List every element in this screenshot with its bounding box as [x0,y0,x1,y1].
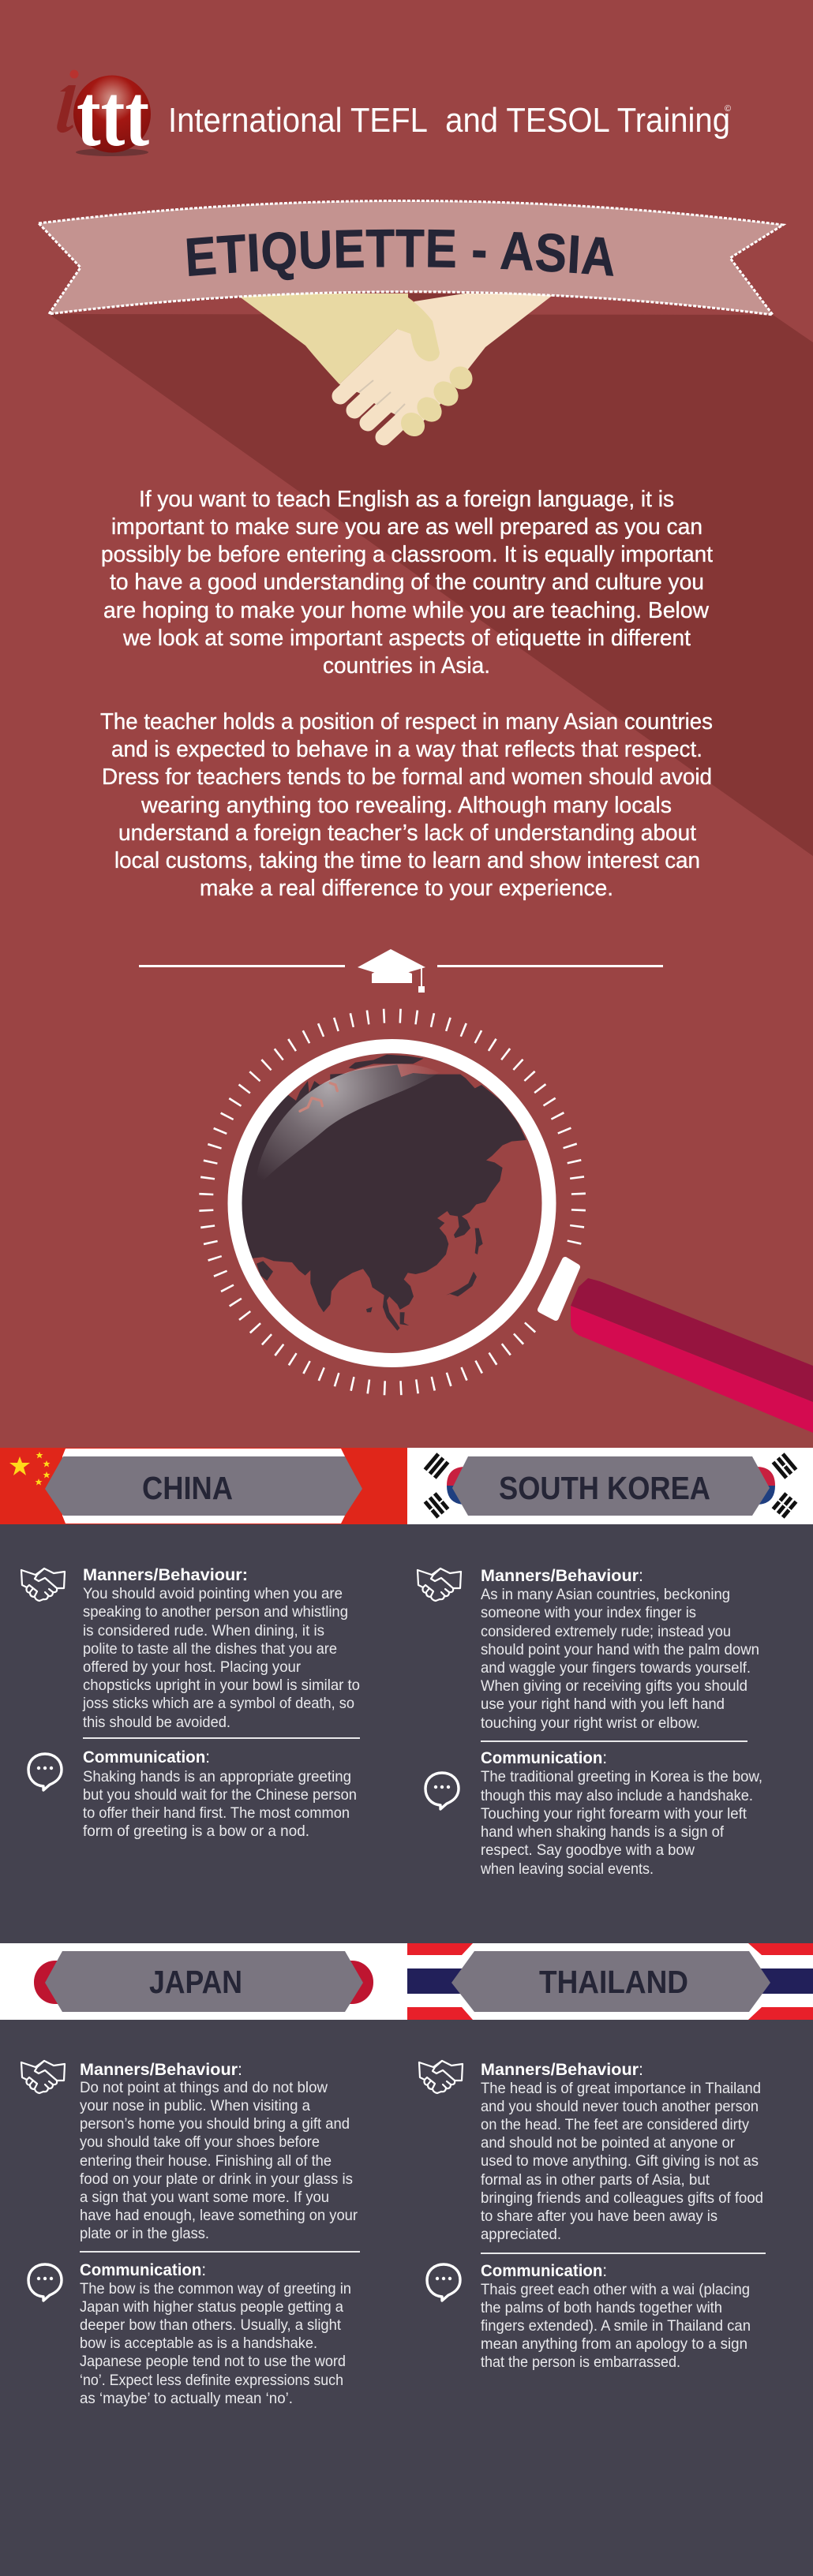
text: manners: formal as in other parts of Asia, but [481,2171,710,2189]
lens highlight [259,1064,435,1174]
text: communication: deeper bow than others. Usually, a slight [80,2316,342,2334]
text: manners: used to move anything. Gift giving is not as [481,2152,759,2170]
paragraph 1: countries in Asia. [323,653,490,679]
long shadow [49,314,813,856]
magnifying glass over map of Asia [206,1015,813,1433]
icon: handshake [21,1568,65,1601]
text: manners: touching your right wrist or elbow. [481,1714,700,1732]
logo wordmark: International TEFL and TESOL Training [168,101,730,140]
paragraph 2: wearing anything too revealing. Although many locals [140,793,672,818]
text: manners: As in many Asian countries, beckoning [481,1586,730,1603]
icon: speech bubble [28,1754,62,1790]
heading: Thailand: THAILAND [539,1964,688,2000]
icon: handshake [419,2061,463,2093]
text: manners: The head is of great importance in Thailand [481,2080,761,2097]
icon: speech bubble [427,2264,460,2301]
logo mark [57,67,151,165]
text: communication: bow is acceptable as is a handshake. [80,2335,317,2352]
right hand fingers [340,373,408,437]
text: communication: The traditional greeting in Korea is the bow, [481,1768,762,1785]
icon: trigrams [425,1454,796,1517]
text: communication: Communication: [481,2262,607,2280]
panel: Japan [0,1943,407,2407]
divider with graduation cap [139,949,663,993]
tick ring [206,1015,579,1388]
text: communication: though this may also include a handshake. [481,1787,753,1804]
panel: South Korea [407,1448,813,1878]
paragraph 1 [101,487,713,679]
text: manners: Manners/Behaviour: [80,2061,242,2079]
text: communication [480,1749,762,1878]
text: communication: Communication: [80,2261,206,2279]
text: manners: you should take off your shoes before [80,2133,320,2151]
text: communication: as ‘maybe’ to actually mean ‘no’. [80,2390,293,2407]
shadow sliver under ribbon [320,293,464,301]
logo mark: ttt [77,67,149,165]
paragraph 1: important to make sure you are as well prepared as you can [111,514,702,540]
header: China flag [0,1448,407,1524]
intro text [100,487,713,901]
logo [57,67,731,165]
text: manners: have had enough, leave something on your [80,2207,358,2224]
paragraph 2: and is expected to behave in a way that reflects that respect. [111,737,702,762]
heading: China: CHINA [142,1470,233,1506]
title [212,267,774,286]
paragraph 2: local customs, taking the time to learn and show interest can [114,848,700,873]
paragraph 1: possibly be before entering a classroom. It is equally important [101,542,713,567]
paragraph 2: understand a foreign teacher’s lack of understanding about [118,821,696,846]
text: manners: to share after you have been away is [481,2208,717,2225]
text: manners: bringing friends and colleagues gifts of food [481,2189,763,2207]
text: communication: fingers extended). A smile in Thailand can [481,2317,751,2335]
text: communication: to offer their hand first. The most common [83,1804,350,1822]
icon: handshake [21,2061,65,2093]
right arm and palm [339,293,555,430]
text: manners: your nose in public. When visiting a [80,2097,310,2114]
text: communication [80,2261,351,2407]
text: communication [481,2262,751,2371]
text: manners: Do not point at things and do not blow [80,2079,328,2096]
paragraph 2: Dress for teachers tends to be formal and women should avoid [102,765,712,790]
text: manners: use your right hand with you left hand [481,1696,725,1713]
panel: Thailand [407,1943,813,2371]
paragraph 2: make a real difference to your experience. [200,876,613,901]
text: manners: entering their house. Finishing all of the [80,2152,332,2170]
text: manners: person’s home you should bring a gift and [80,2115,350,2133]
text: communication: that the person is embarrassed. [481,2354,680,2371]
paragraph 1: we look at some important aspects of etiquette in different [122,626,691,651]
text: manners: considered extremely rude; instead you [481,1623,731,1640]
icon: graduation cap [358,949,425,993]
text: manners: someone with your index finger is [481,1604,696,1621]
text: communication: the palms of both hands together with [481,2299,722,2316]
text: manners: When giving or receiving gifts you should [481,1677,747,1695]
text: communication: Communication: [481,1749,607,1767]
text: manners: and should not be pointed at anyone or [481,2134,735,2152]
paragraph 1: If you want to teach English as a foreign language, it is [139,487,674,512]
text: communication: form of greeting is a bow or a nod. [83,1823,309,1840]
text: communication: hand when shaking hands is a sign of [481,1823,725,1841]
icon: handshake [418,1568,461,1601]
ribbon shape [39,200,783,315]
text: manners: You should avoid pointing when you are [83,1585,343,1602]
text: manners: a sign that you want some more. If you [80,2189,329,2206]
header: Thailand flag [407,1943,813,2020]
text: manners: plate or in the glass. [80,2225,209,2242]
text: communication: mean anything from an apology to a sign [481,2335,747,2353]
text: communication: when leaving social events. [480,1860,654,1878]
text: communication: but you should wait for the Chinese person [83,1786,357,1804]
text: manners: Manners/Behaviour: [481,2061,643,2079]
map of Asia [229,1041,526,1331]
title ribbon: ETIQUETTE - ASIA [186,229,614,281]
paragraph 1: to have a good understanding of the country and culture you [110,570,704,595]
text: manners: is considered rude. When dining, it is [83,1622,324,1639]
text: communication: Touching your right forearm with your left [481,1805,747,1823]
text: manners: should point your hand with the palm down [481,1641,759,1658]
text: manners: appreciated. [481,2226,561,2243]
text: manners [82,1566,360,1731]
header: South Korea flag [407,1448,813,1524]
text: communication: ‘no’. Expect less definite expressions such [80,2372,343,2389]
handle [571,1278,813,1433]
paragraph 2 [100,709,713,901]
text: manners: and waggle your fingers towards yourself. [481,1659,751,1677]
text: manners: on the head. The feet are considered dirty [481,2116,749,2133]
text: manners: and you should never touch another person [481,2098,759,2115]
text: manners: speaking to another person and whistling [83,1603,348,1621]
text: communication: Shaking hands is an appropriate greeting [83,1768,351,1785]
text: manners [80,2061,358,2242]
heading: South Korea: SOUTH KOREA [499,1470,710,1506]
handle neck [541,1260,577,1318]
text: manners: offered by your host. Placing your [83,1658,301,1676]
text: communication: Japanese people tend not to use the word [80,2353,346,2370]
text: manners [481,2061,763,2243]
text: communication: Communication: [83,1748,210,1767]
left hand fingertips [396,361,478,441]
text: manners: polite to taste all the dishes that you are [83,1640,337,1658]
text: manners: joss sticks which are a symbol of death, so [82,1695,354,1712]
text: communication [83,1748,357,1840]
heading: Japan: JAPAN [149,1964,242,2000]
paragraph 1: are hoping to make your home while you are teaching. Below [103,598,710,623]
header: Japan flag [0,1943,407,2020]
background: red upper section [0,0,813,1449]
title ribbon [38,200,786,316]
text: manners: chopsticks upright in your bowl is similar to [83,1677,360,1694]
text: manners: this should be avoided. [83,1714,230,1731]
panel: China [0,1448,407,1840]
text: communication: Thais greet each other with a wai (placing [481,2281,750,2298]
text: manners [481,1567,759,1732]
text: communication: The bow is the common way of greeting in [80,2280,351,2297]
icon: speech bubble [425,1773,459,1809]
text: communication: respect. Say goodbye with a bow [481,1841,695,1859]
text: communication: Japan with higher status people getting a [80,2298,343,2316]
paragraph 2: The teacher holds a position of respect in many Asian countries [100,709,713,735]
text: manners: food on your plate or drink in your glass is [80,2170,353,2188]
left arm and thumb [235,293,440,384]
lens rim [235,1046,549,1360]
text: manners: Manners/Behaviour: [481,1567,643,1585]
background: dark lower section [0,1524,813,2576]
illustration: handshake [235,293,555,441]
icon: speech bubble [28,2264,62,2301]
text: manners: Manners/Behaviour: [83,1566,248,1584]
copyright mark: © [725,104,731,114]
icon: flag stars [9,1452,51,1485]
